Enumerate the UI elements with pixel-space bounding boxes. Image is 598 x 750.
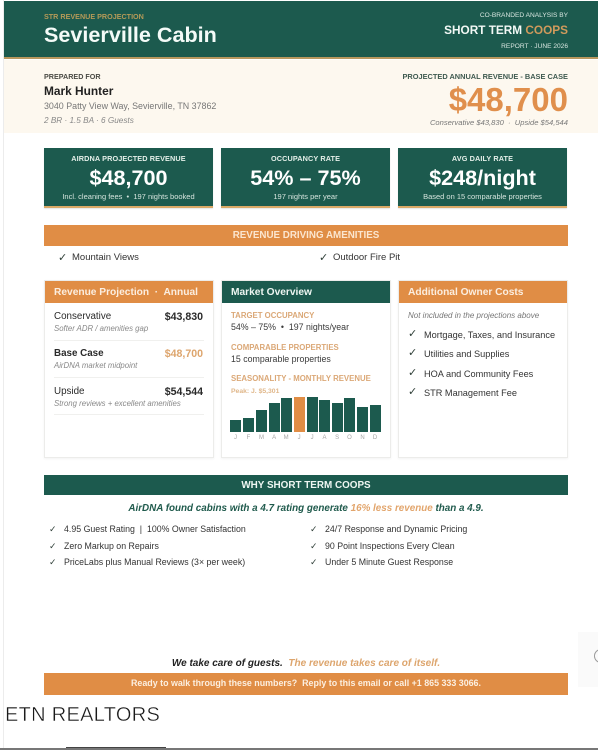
KPI: occupancy	[221, 148, 390, 208]
panel: revenue projection	[44, 280, 214, 458]
widget circle	[594, 649, 598, 663]
header banner	[4, 1, 598, 59]
co-brand block	[444, 12, 568, 50]
KPI label: AIRDNA PROJECTED REVENUE	[71, 154, 186, 163]
title: Sevierville Cabin	[44, 22, 217, 47]
call to action bar: Ready to walk through these numbers? Reply to this email or call +1 865 333 3066.	[131, 678, 481, 688]
revenue range: Conservative $43,830 · Upside $54,544	[430, 118, 568, 127]
benefit: guest response: Under 5 Minute Guest Response	[325, 557, 453, 567]
panel: additional owner costs	[398, 280, 568, 458]
panel: market overview	[221, 280, 391, 458]
chart month labels: M	[284, 435, 289, 441]
target occupancy label: TARGET OCCUPANCY	[231, 311, 314, 320]
panel note: Not included in the projections above	[408, 311, 539, 320]
cost: management: STR Management Fee	[424, 388, 517, 398]
scenario note: Softer ADR / amenities gap	[54, 324, 148, 333]
scenario: base case	[54, 348, 203, 370]
KPI value: 54% – 75%	[250, 165, 361, 190]
comparable properties value: 15 comparable properties	[231, 354, 331, 364]
chart month labels: S	[335, 435, 339, 441]
co-brand line: CO-BRANDED ANALYSIS BY	[480, 12, 568, 19]
scenario value: $43,830	[165, 311, 203, 323]
cost list	[408, 328, 555, 398]
chart month labels	[234, 434, 377, 441]
chart month labels: J	[311, 435, 314, 441]
scenario value: $54,544	[165, 386, 203, 398]
scenario name: Upside	[54, 386, 84, 397]
bottom rule	[0, 748, 598, 750]
scenario name: Base Case	[54, 348, 104, 359]
why short term coops heading	[44, 475, 568, 495]
KPI label: AVG DAILY RATE	[452, 154, 513, 163]
side widget	[578, 632, 598, 687]
amenity text: Mountain Views	[72, 252, 139, 263]
brand name: SHORT TERM COOPS	[444, 23, 568, 37]
chart month labels: F	[247, 435, 250, 441]
chart month labels: J	[234, 435, 237, 441]
benefit: markup: ✓	[49, 541, 57, 551]
chart month labels: A	[322, 435, 326, 441]
cost: mortgage: Mortgage, Taxes, and Insurance	[424, 330, 555, 340]
prepared for label: PREPARED FOR	[44, 72, 101, 81]
scenario note: AirDNA market midpoint	[54, 361, 137, 370]
KPI note: Incl. cleaning fees • 197 nights booked	[62, 192, 195, 201]
cost: HOA: ✓	[408, 367, 417, 379]
prepared for band	[4, 60, 598, 133]
panel heading	[222, 281, 390, 303]
cost: mortgage: ✓	[408, 328, 417, 340]
bar chart: monthly revenue	[230, 397, 381, 432]
KPI label: OCCUPANCY RATE	[271, 154, 340, 163]
check icon: ✓	[319, 252, 328, 264]
chart month labels: N	[360, 435, 365, 441]
KPI note: Based on 15 comparable properties	[423, 192, 542, 201]
chart month labels: A	[272, 435, 276, 441]
benefit: rating: 4.95 Guest Rating | 100% Owner Satisfaction	[64, 524, 246, 534]
clipped footer text	[66, 747, 166, 748]
KPI note: 197 nights per year	[273, 192, 338, 201]
scenario name: Conservative	[54, 311, 111, 322]
property details: 2 BR · 1.5 BA · 6 Guests	[44, 116, 134, 125]
tagline: We take care of guests. The revenue takes care of itself.	[172, 658, 440, 669]
cost: management: ✓	[408, 386, 417, 398]
panel heading	[399, 281, 567, 303]
report date: REPORT · JUNE 2026	[501, 43, 568, 50]
amenities heading	[44, 225, 568, 246]
KPI: daily rate	[398, 148, 567, 208]
amenities heading: REVENUE DRIVING AMENITIES	[233, 230, 379, 241]
cost: utilities: Utilities and Supplies	[424, 349, 509, 359]
benefit: rating: ✓	[49, 524, 57, 534]
panel heading: Additional Owner Costs	[408, 287, 523, 298]
projected revenue value: $48,700	[449, 81, 568, 118]
scenario note: Strong reviews + excellent amenities	[54, 399, 181, 408]
benefit: markup: Zero Markup on Repairs	[64, 541, 159, 551]
benefit: response: 24/7 Response and Dynamic Pricing	[325, 524, 467, 534]
benefit: pricing reviews: ✓	[49, 557, 57, 567]
amenity: mountain views	[58, 252, 139, 264]
call to action bar	[44, 673, 568, 695]
benefit: inspections: ✓	[310, 541, 318, 551]
panel heading	[45, 281, 213, 303]
KPI: projected revenue	[44, 148, 213, 208]
amenity text: Outdoor Fire Pit	[333, 252, 400, 263]
scenario: upside	[54, 386, 203, 408]
why short term coops heading: WHY SHORT TERM COOPS	[241, 480, 371, 491]
panel heading: Market Overview	[231, 287, 312, 298]
projected revenue label: PROJECTED ANNUAL REVENUE - BASE CASE	[402, 72, 568, 81]
comparable properties label: COMPARABLE PROPERTIES	[231, 343, 339, 352]
benefit: guest response: ✓	[310, 557, 318, 567]
benefit: pricing reviews: PriceLabs plus Manual Reviews (3× per week)	[64, 557, 245, 567]
panel heading: Revenue Projection · Annual	[54, 287, 198, 298]
benefit: response: ✓	[310, 524, 318, 534]
benefit: inspections: 90 Point Inspections Every Clean	[325, 541, 455, 551]
eyebrow label: STR REVENUE PROJECTION	[44, 12, 144, 21]
scenario: conservative	[54, 311, 203, 333]
AirDNA finding: AirDNA found cabins with a 4.7 rating generate 16% less revenue than a 4.9.	[128, 503, 484, 514]
KPI value: $248/night	[429, 165, 536, 190]
cost: HOA: HOA and Community Fees	[424, 369, 533, 379]
ETN Realtors wordmark: ETN REALTORS	[5, 704, 160, 726]
client name: Mark Hunter	[44, 84, 113, 98]
seasonality label: SEASONALITY - MONTHLY REVENUE	[231, 374, 371, 383]
peak note: Peak: J. $5,301	[231, 388, 279, 395]
check icon: ✓	[58, 252, 67, 264]
cost: utilities: ✓	[408, 347, 417, 359]
address: 3040 Patty View Way, Sevierville, TN 37862	[44, 101, 216, 111]
chart month labels: O	[347, 435, 352, 441]
chart month labels: J	[298, 435, 301, 441]
chart month labels: M	[259, 435, 264, 441]
target occupancy value: 54% – 75% • 197 nights/year	[231, 322, 349, 332]
KPI value: $48,700	[89, 165, 168, 190]
scenario value: $48,700	[165, 348, 203, 360]
chart month labels: D	[373, 435, 377, 441]
amenity: fire pit	[319, 252, 400, 264]
benefits list	[49, 524, 467, 567]
page edge	[3, 0, 4, 748]
